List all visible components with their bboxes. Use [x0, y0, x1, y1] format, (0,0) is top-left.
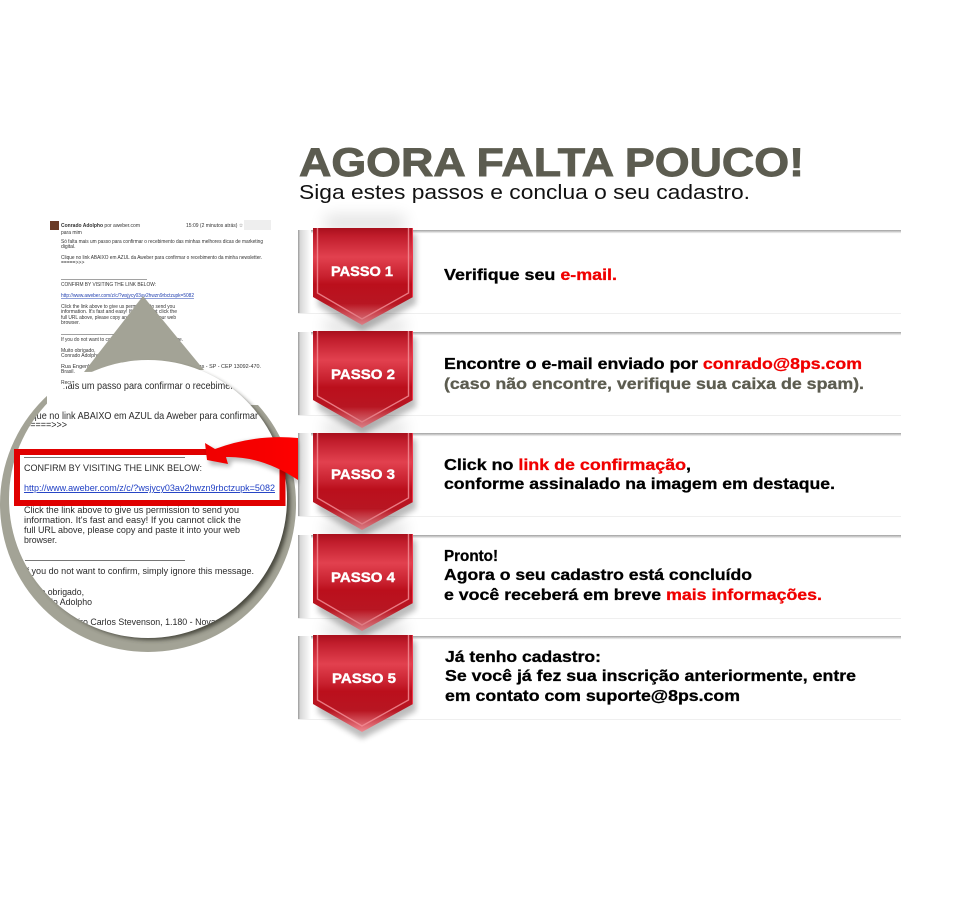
- email screenshot with magnifier: [0, 218, 298, 652]
- magnifier outer ring: [0, 356, 296, 652]
- magnifier lens: CONFIRM BY VISITING THE LINK BELOW:: [24, 463, 202, 474]
- magnifier lens: full URL above, please copy and paste it into your web: [24, 525, 240, 536]
- title: AGORA FALTA POUCO!: [299, 141, 804, 185]
- ribbon: passo 5: PASSO 5: [332, 670, 396, 686]
- step 1 panel: [298, 230, 901, 314]
- email screenshot: Só falta mais um passo para confirmar o recebimento das minhas melhores dicas de marketing: [61, 239, 263, 245]
- step 4 panel: [298, 535, 901, 619]
- magnifier lens: =====>>>: [25, 419, 67, 431]
- email screenshot: Rua Engenheiro Carlos Stevenson, 1.180 - Nova Campinas - SP - CEP 13092-470.: [61, 364, 261, 370]
- magnifier lens: information. It's fast and easy! If you cannot click the: [24, 515, 241, 526]
- magnifier lens: http://www.aweber.com/z/c/?wsjycy03av2hwzn9rbctzupk=5082: [24, 483, 275, 494]
- magnifier beam: [84, 296, 204, 372]
- step 2 panel: [298, 332, 901, 416]
- arrow: [205, 437, 298, 484]
- step 3 text: Click no link de confirmação ,: [444, 457, 691, 474]
- step 3 text: [444, 457, 835, 493]
- email screenshot: digital.: [61, 244, 75, 250]
- email screenshot: 15:09 (2 minutos atrás) ☆: [186, 223, 244, 229]
- ribbon: passo 2: PASSO 2: [331, 366, 395, 382]
- step 4 text: [444, 548, 822, 604]
- email screenshot: CONFIRM BY VISITING THE LINK BELOW:: [61, 282, 156, 288]
- email screenshot: If you do not want to confirm, simply ignore this message.: [61, 337, 183, 343]
- email screenshot: Brasil.: [61, 369, 75, 375]
- email screenshot: Clique no link ABAIXO em AZUL da Aweber para confirmar o recebimento da minha newsletter.: [61, 255, 262, 261]
- magnifier lens: browser.: [24, 535, 57, 546]
- step 5 panel: [298, 636, 901, 720]
- step 4 text: e você receberá em breve mais informações.: [444, 587, 822, 604]
- magnifier lens: Rua Engenheiro Carlos Stevenson, 1.180 - Nova Campinas: [24, 617, 258, 628]
- email screenshot: Conrado Adolpho por aweber.com: [61, 223, 140, 229]
- subtitle: Siga estes passos e conclua o seu cadastro.: [299, 181, 750, 204]
- step 4 text: Pronto!: [444, 548, 498, 565]
- step 5 text: em contato com suporte@8ps.com: [445, 688, 740, 705]
- lens shadow: [14, 364, 290, 640]
- magnifier lens: If you do not want to confirm, simply ignore this message.: [24, 566, 254, 577]
- ribbon: passo 1: [313, 216, 416, 332]
- step 2 text: [444, 356, 864, 393]
- email screenshot: para mim: [61, 230, 82, 236]
- highlight box: [17, 452, 282, 503]
- step 5 text: Já tenho cadastro:: [445, 649, 601, 666]
- step 5 text: Se você já fez sua inscrição anteriormente, entre: [445, 668, 856, 685]
- step 3 text: conforme assinalado na imagem em destaque.: [444, 476, 835, 493]
- magnifier lens: [9, 360, 287, 638]
- magnifier lens: mais um passo para confirmar o recebimento: [60, 380, 243, 392]
- ribbon: passo 3: [313, 421, 416, 537]
- email screenshot: =====>>>: [61, 260, 84, 266]
- email screenshot: browser.: [61, 320, 80, 326]
- magnifier lens: Click the link above to give us permission to send you: [24, 505, 239, 516]
- ribbon: passo 3: PASSO 3: [331, 466, 395, 482]
- email screenshot: Muito obrigado,: [61, 348, 95, 354]
- magnifier lens: Muito obrigado,: [24, 587, 84, 598]
- magnifier lens: Conrado Adolpho: [24, 597, 92, 608]
- email screenshot: full URL above, please copy and paste it into your web: [61, 315, 176, 321]
- step 4 text: Agora o seu cadastro está concluído: [444, 567, 752, 584]
- step 2 text: (caso não encontre, verifique sua caixa de spam).: [444, 376, 864, 393]
- ribbon: passo 2: [313, 319, 416, 435]
- ribbon: passo 4: PASSO 4: [331, 569, 395, 585]
- ribbon: passo 5: [313, 623, 416, 739]
- step 1 text: Verifique seu e-mail.: [444, 267, 617, 284]
- magnifier lens: Clique no link ABAIXO em AZUL da Aweber para confirmar: [21, 410, 258, 422]
- ribbon: passo 4: [313, 522, 416, 638]
- email screenshot: information. It's fast and easy! If you cannot click the: [61, 309, 177, 315]
- email screenshot: Click the link above to give us permission to send you: [61, 304, 175, 310]
- email screenshot: Recusar: [61, 380, 80, 386]
- step 2 text: Encontre o e-mail enviado por conrado@8ps.com: [444, 356, 862, 373]
- step 3 panel: [298, 433, 901, 517]
- email screenshot: [47, 218, 272, 405]
- email screenshot: http://www.aweber.com/z/c/?wsjycy03av2hwzn9rbctzupk=5082: [61, 293, 194, 299]
- email screenshot: Conrado Adolpho: [61, 353, 100, 359]
- step 5 text: [445, 649, 856, 705]
- ribbon: passo 1: PASSO 1: [331, 263, 393, 279]
